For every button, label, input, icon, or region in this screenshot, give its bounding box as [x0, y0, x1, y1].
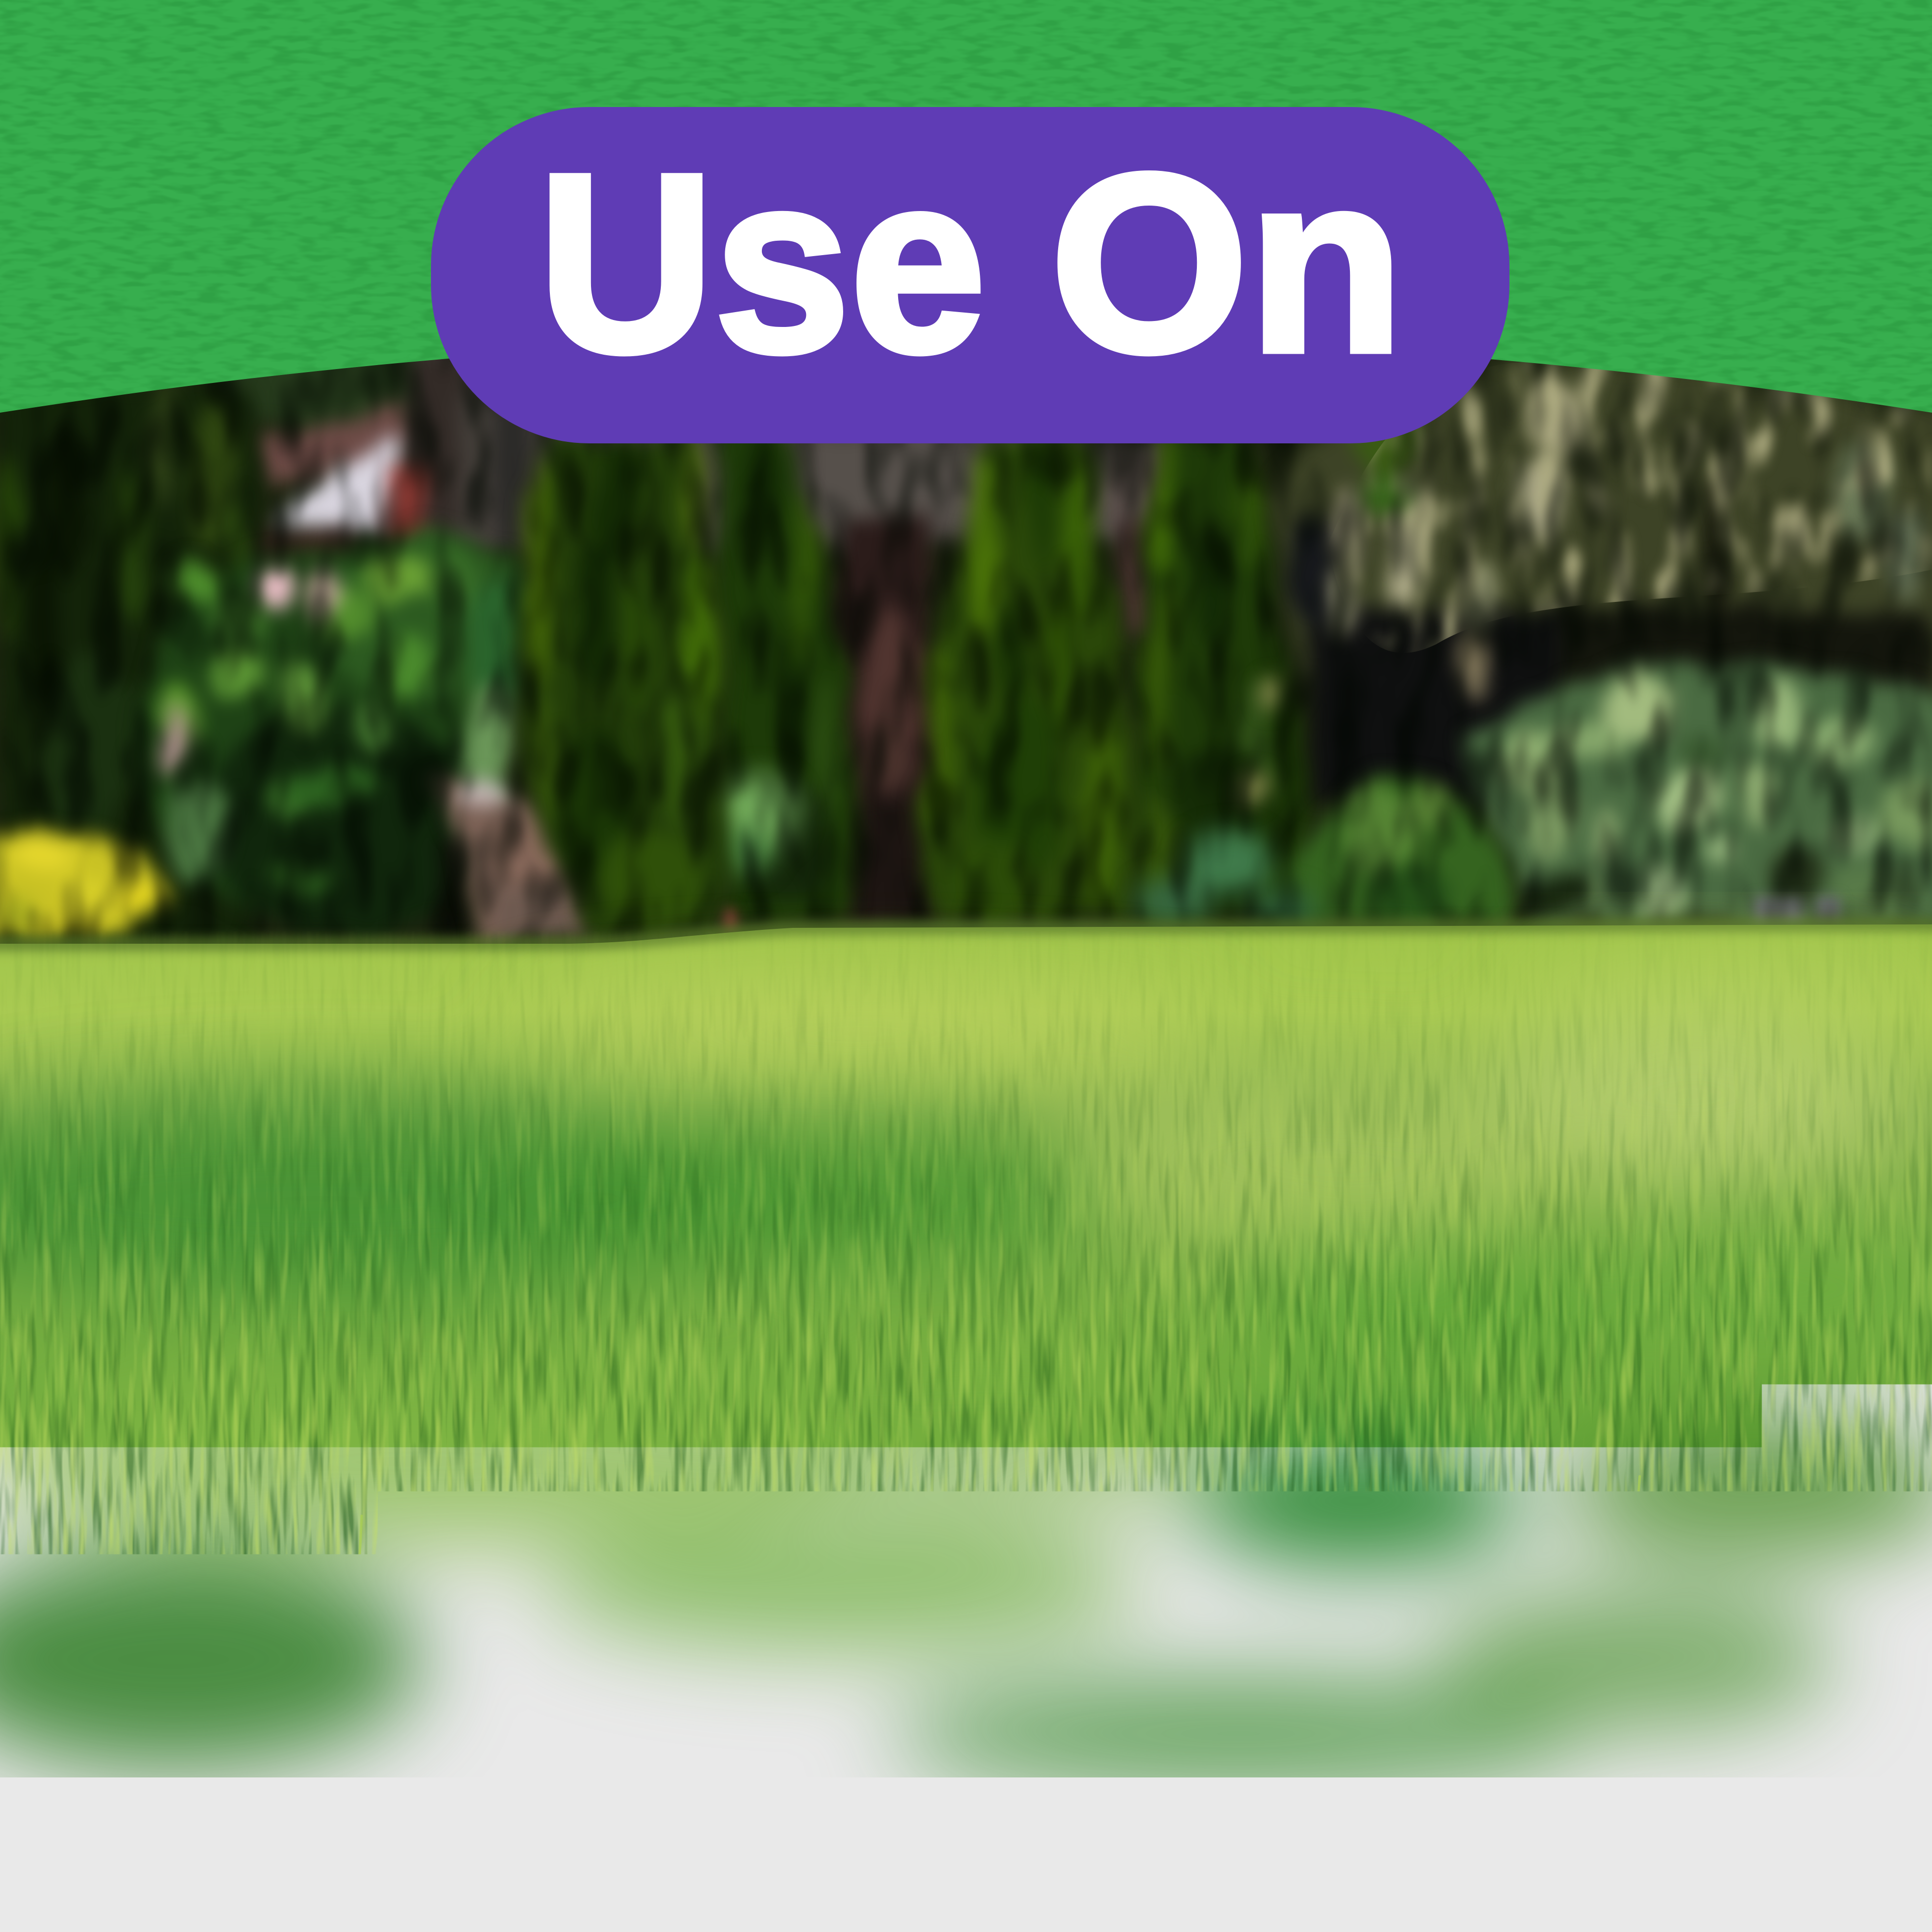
footer slogan: EASY to APPLY: [98, 1816, 686, 1907]
grey planters: [724, 897, 1840, 935]
arborvitae tree 3: [922, 436, 1136, 926]
footer slogan: EASY to APPLY: APPLY: [427, 1818, 686, 1907]
yellow bush: [0, 828, 171, 936]
medium green bush: [1298, 774, 1511, 926]
heading text: [538, 121, 1404, 405]
pale green shrub on the right: [1461, 662, 1932, 926]
beige foliage highlights: [1328, 362, 1932, 653]
boulder: [431, 778, 594, 941]
heading text: Use: [538, 121, 986, 405]
heading pill: Use On: [431, 107, 1509, 443]
background wall and house: [218, 322, 1159, 926]
footer slogan: EASY to APPLY: EASY: [98, 1816, 311, 1905]
variegated tree on the right: [1242, 361, 1932, 807]
leafy shrub left of the evergreens: [134, 530, 530, 941]
footnote: see label for full list: *SEE LABEL: [1565, 1807, 1879, 1866]
footnote: see label for full list: [1492, 1807, 1879, 1924]
pale plant between trees: [713, 773, 800, 874]
panel: white footer band: [0, 1777, 1932, 1932]
panel: green wavy header: [0, 0, 1932, 446]
lawn base colour: [0, 924, 1932, 1783]
foliage mottling: [0, 297, 1932, 951]
arborvitae tree 1: [519, 436, 726, 941]
arborvitae tree 4: [1129, 426, 1313, 921]
low teal bush: [1134, 830, 1318, 929]
footer slogan: EASY to APPLY: to: [337, 1824, 407, 1904]
lawn light and shadow patches: [0, 961, 1932, 1793]
arborvitae tree 2 behind: [718, 376, 856, 921]
panel: lawn: [0, 924, 1932, 1793]
grass streak texture: [0, 931, 1932, 1778]
left dark evergreen mass: [0, 381, 258, 946]
footnote: see label for full list: FOR FULL LIST: [1492, 1864, 1879, 1924]
heading text: On: [1050, 121, 1404, 405]
panel: blurred garden background: [0, 297, 1932, 951]
sharp grass blades: [54, 1476, 1798, 1778]
lawn horizon soft edge: [0, 924, 1932, 944]
